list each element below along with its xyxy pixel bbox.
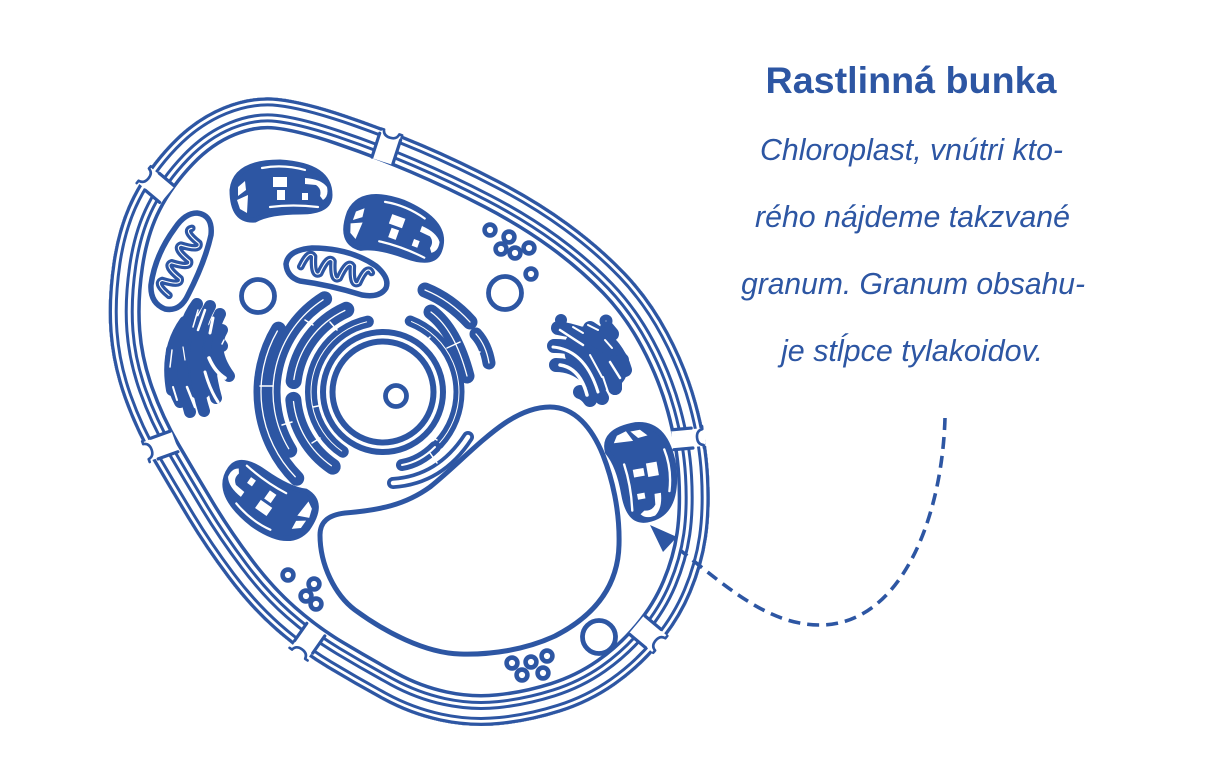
large vesicle circles bbox=[242, 276, 616, 654]
chloroplast: top left bbox=[232, 162, 330, 220]
description text: je stĺpce tylakoidov. bbox=[777, 332, 1043, 368]
nucleus with envelope and nucleolus bbox=[323, 332, 443, 452]
title: Rastlinná bunka bbox=[766, 60, 1057, 101]
golgi apparatus: right bbox=[551, 313, 641, 403]
description text bbox=[741, 132, 1085, 368]
description text: granum. Granum obsahu- bbox=[741, 266, 1085, 301]
chloroplast: right, indicated by the arrow bbox=[604, 419, 682, 525]
description text: Chloroplast, vnútri kto- bbox=[760, 132, 1063, 167]
infographic canvas bbox=[108, 66, 1084, 726]
chloroplast: upper middle bbox=[339, 186, 451, 274]
golgi apparatus: left bbox=[170, 304, 229, 412]
mitochondrion: left bbox=[151, 213, 211, 309]
mitochondrion: centre bbox=[286, 248, 387, 296]
description text: rého nájdeme takzvané bbox=[755, 199, 1070, 234]
endoplasmic reticulum around the nucleus bbox=[210, 219, 556, 565]
plasmodesmata pits in the wall bbox=[135, 127, 706, 662]
ribosome vesicles bbox=[283, 225, 552, 680]
central vacuole bbox=[320, 407, 619, 654]
chloroplast: lower left bbox=[211, 448, 325, 552]
dashed arrow pointing to the chloroplast bbox=[650, 418, 945, 625]
cell wall and membrane layers bbox=[109, 97, 710, 726]
